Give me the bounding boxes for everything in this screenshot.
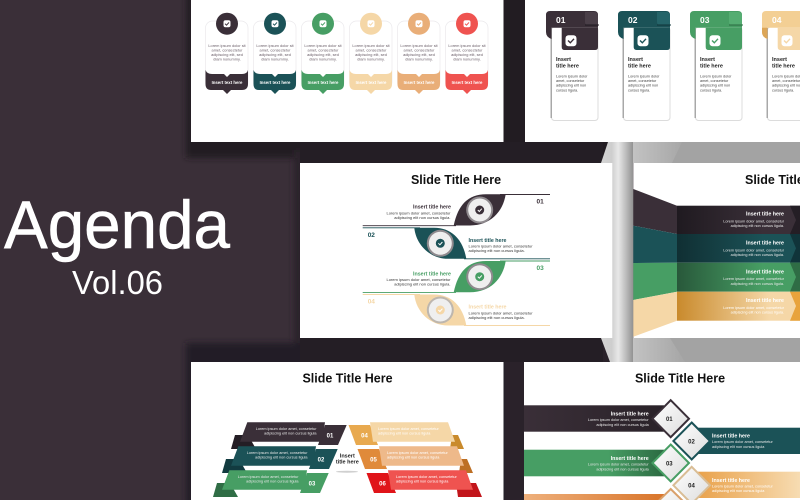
card 1: adipiscing elit, sed xyxy=(211,52,243,57)
card 04: 04 xyxy=(772,15,782,25)
card 04: Insert xyxy=(772,57,787,63)
card 1: Lorem ipsum dolor sit xyxy=(208,43,247,48)
band 2 xyxy=(677,234,800,263)
step 03: Lorem ipsum dolor amet, consetetur xyxy=(386,277,451,282)
card 3: adipiscing elit, sed xyxy=(307,52,339,57)
band 01 xyxy=(524,405,664,432)
band 05 xyxy=(524,494,664,500)
ribbon 01: Lorem ipsum dolor amet, consetetur xyxy=(256,427,317,431)
title: Agenda Vol.06: Agenda xyxy=(4,187,230,263)
band 1: Insert title here xyxy=(746,212,784,218)
card 01 xyxy=(546,11,599,120)
ribbon 06: adipiscing elit non cursus ligula xyxy=(396,480,449,484)
band 4: Insert title here xyxy=(746,298,784,304)
card 3: diam nonummy. xyxy=(309,56,337,62)
title: Agenda Vol.06: Vol.06 xyxy=(72,264,163,301)
card 03: adipiscing elit non xyxy=(700,84,730,88)
band 4: adipiscing elit non cursus ligula. xyxy=(731,310,784,314)
step 01: Lorem ipsum dolor amet, consetetur xyxy=(386,210,451,215)
card 03: amet, consetetur xyxy=(700,79,729,83)
diamond 04 xyxy=(673,467,710,500)
card 02: Lorem ipsum dolor xyxy=(628,74,660,78)
step 02: Lorem ipsum dolor amet, consetetur xyxy=(468,244,533,249)
ribbon 01: adipiscing elit non cursus ligula xyxy=(264,432,317,436)
step 04 xyxy=(363,294,550,326)
diamond 03 xyxy=(652,444,689,482)
band 04: Lorem ipsum dolor amet, consetetur xyxy=(712,484,774,488)
card 4: amet, consectetur xyxy=(356,48,387,52)
step 03 xyxy=(363,261,550,292)
card 04 xyxy=(762,11,800,120)
slide 5 heading: Slide Title Here xyxy=(302,372,393,386)
band 4 xyxy=(677,292,800,321)
band 3: Insert title here xyxy=(746,269,784,275)
panel: slide 2, numbered flag cards xyxy=(525,0,800,142)
card 01: cursus ligula. xyxy=(556,88,578,92)
band 2: Insert title here xyxy=(746,240,784,246)
diamond 02: 02 xyxy=(688,439,695,445)
ribbon 03 xyxy=(213,470,329,497)
card 01: title here xyxy=(556,64,579,70)
card 02: amet, consetetur xyxy=(628,79,657,83)
card 04: amet, consetetur xyxy=(772,79,800,83)
band 01: Lorem ipsum dolor amet, consetetur xyxy=(588,418,649,422)
panel: slide 3, leaf timeline xyxy=(300,163,612,338)
ribbon 03: 03 xyxy=(309,481,316,487)
panel: slide 6, diamond steps xyxy=(524,362,800,500)
card 03 xyxy=(690,11,743,120)
card 02: adipiscing elit non xyxy=(628,84,658,88)
band 4: Lorem ipsum dolor amet, consetetur xyxy=(723,306,785,310)
card 02: cursus ligula. xyxy=(628,88,650,92)
card 1 xyxy=(206,13,248,94)
band 02 xyxy=(698,428,800,454)
card 1: Insert text here xyxy=(212,80,243,85)
band 3: adipiscing elit non cursus ligula. xyxy=(731,282,784,286)
diamond 01 xyxy=(652,400,689,437)
card 01: Insert xyxy=(556,57,571,63)
card 01: Lorem ipsum dolor xyxy=(556,74,588,78)
diamond 05 xyxy=(652,489,689,500)
card 6: Lorem ipsum dolor sit xyxy=(448,43,487,48)
ribbon 04: 04 xyxy=(361,433,368,439)
center label: title here xyxy=(336,460,359,466)
step 03: Insert title here xyxy=(413,271,451,277)
band 3 xyxy=(677,263,800,292)
card 3: Lorem ipsum dolor sit xyxy=(304,43,343,48)
card 02: Insert xyxy=(628,57,643,63)
card 1: diam nonummy. xyxy=(213,56,241,62)
ribbon 01: 01 xyxy=(327,433,334,439)
card 6: amet, consectetur xyxy=(452,48,483,52)
card 5: Insert text here xyxy=(404,80,435,85)
band 02: adipiscing elit non cursus ligula xyxy=(712,445,765,449)
card 5: diam nonummy. xyxy=(405,56,433,62)
band 03: Lorem ipsum dolor amet, consetetur xyxy=(588,462,649,466)
band 04: adipiscing elit non cursus ligula xyxy=(712,489,765,493)
band 2: Lorem ipsum dolor amet, consetetur xyxy=(723,248,785,252)
card 6: Insert text here xyxy=(452,80,483,85)
card 6: diam nonummy. xyxy=(453,56,481,62)
card 01: adipiscing elit non xyxy=(556,84,586,88)
card 3: amet, consectetur xyxy=(308,48,339,52)
card 2: diam nonummy. xyxy=(261,56,289,62)
band 03: adipiscing elit non cursus ligula xyxy=(596,467,650,471)
card 5: Lorem ipsum dolor sit xyxy=(400,43,439,48)
step 02: Insert title here xyxy=(468,238,507,244)
ribbon 06: 06 xyxy=(379,481,386,487)
card 03: Lorem ipsum dolor xyxy=(700,74,732,78)
center label: Insert xyxy=(340,453,355,459)
card 04: cursus ligula. xyxy=(772,88,794,92)
ribbon 02: adipiscing elit non cursus ligula xyxy=(255,456,308,460)
card 5: adipiscing elit, sed xyxy=(403,52,435,57)
ribbon 03: adipiscing elit non cursus ligula xyxy=(246,480,299,484)
diamond 01: 01 xyxy=(666,417,673,423)
step 02: 02 xyxy=(368,232,375,239)
ribbon 03: Lorem ipsum dolor amet, consetetur xyxy=(238,475,299,479)
step 01: Insert title here xyxy=(413,205,451,211)
ribbon 05: 05 xyxy=(370,457,377,463)
ribbon 05: Lorem ipsum dolor amet, consetetur xyxy=(387,451,449,455)
card 03: cursus ligula. xyxy=(700,88,722,92)
ribbon 05 xyxy=(358,446,473,473)
panel: slide 1, six check cards xyxy=(191,0,504,142)
band 01: Insert title here xyxy=(611,411,649,417)
band 01: adipiscing elit non cursus ligula xyxy=(596,423,650,427)
step 01: 01 xyxy=(536,198,544,206)
step 03: adipiscing elit non cursus ligula. xyxy=(394,282,450,287)
step 04: 04 xyxy=(368,298,375,306)
card 5 xyxy=(398,13,440,94)
band 1 xyxy=(677,206,800,234)
band 03: Insert title here xyxy=(611,456,649,462)
panel: slide 4, perspective bands xyxy=(633,163,800,338)
step 02 xyxy=(363,228,550,259)
ribbon 02: 02 xyxy=(318,457,325,463)
band 02: Lorem ipsum dolor amet, consetetur xyxy=(712,440,774,444)
card 4 xyxy=(350,13,392,94)
card 02 xyxy=(618,11,671,120)
ribbon 04: adipiscing elit non cursus ligula xyxy=(378,432,431,436)
card 1: amet, consectetur xyxy=(212,48,243,52)
panel: slide 5, ribbon banners xyxy=(191,362,504,500)
card 2: adipiscing elit, sed xyxy=(259,52,291,57)
band 04: Insert title here xyxy=(712,478,750,484)
title: Agenda Vol.06 xyxy=(4,187,230,301)
card 4: adipiscing elit, sed xyxy=(355,52,387,57)
band 04 xyxy=(698,472,800,498)
left wall xyxy=(633,189,677,337)
diamond 02 xyxy=(673,422,710,460)
card 03: title here xyxy=(700,64,723,70)
card 3 xyxy=(302,13,344,94)
band 1: adipiscing elit non cursus ligula. xyxy=(731,224,784,228)
card 02: title here xyxy=(628,64,651,70)
slide 3 heading: Slide Title Here xyxy=(411,173,501,187)
card 4: Lorem ipsum dolor sit xyxy=(352,43,391,48)
diamond 03: 03 xyxy=(666,461,673,467)
ribbon 02: Lorem ipsum dolor amet, consetetur xyxy=(247,451,308,455)
card 6: adipiscing elit, sed xyxy=(451,52,483,57)
band 1: Lorem ipsum dolor amet, consetetur xyxy=(723,220,785,224)
ribbon 05: adipiscing elit non cursus ligula xyxy=(387,456,440,460)
band 2: adipiscing elit non cursus ligula. xyxy=(731,253,784,257)
step 03: 03 xyxy=(536,265,544,272)
band 02: Insert title here xyxy=(712,434,750,440)
ribbon 06 xyxy=(366,470,482,497)
band 3: Lorem ipsum dolor amet, consetetur xyxy=(723,277,785,281)
card 03: Insert xyxy=(700,57,715,63)
card 2: Insert text here xyxy=(260,80,291,85)
step 04: Insert title here xyxy=(468,305,507,311)
card 4: Insert text here xyxy=(356,80,387,85)
ribbon 04: Lorem ipsum dolor amet, consetetur xyxy=(378,427,440,431)
center label xyxy=(336,453,359,473)
card 02: 02 xyxy=(628,15,638,25)
card 2: amet, consectetur xyxy=(260,48,291,52)
slide 6 heading: Slide Title Here xyxy=(635,372,725,386)
card 5: amet, consectetur xyxy=(404,48,435,52)
step 01 xyxy=(363,194,550,226)
ribbon 02 xyxy=(222,446,338,473)
diamond 04: 04 xyxy=(688,484,695,490)
ribbon 06: Lorem ipsum dolor amet, consetetur xyxy=(396,475,458,479)
band 03 xyxy=(524,450,664,476)
card 3: Insert text here xyxy=(308,80,339,85)
card 6 xyxy=(446,13,488,94)
card 03: 03 xyxy=(700,15,710,25)
card 4: diam nonummy. xyxy=(357,56,385,62)
step 04: Lorem ipsum dolor amet, consetetur xyxy=(468,310,533,315)
step 02: adipiscing elit non cursus ligula. xyxy=(468,248,525,253)
ribbon 04 xyxy=(348,422,464,449)
step 04: adipiscing elit non cursus ligula. xyxy=(468,315,525,320)
card 04: title here xyxy=(772,64,795,70)
card 2 xyxy=(254,13,296,94)
card 01: amet, consetetur xyxy=(556,79,585,83)
ribbon 01 xyxy=(231,422,347,449)
card 2: Lorem ipsum dolor sit xyxy=(256,43,295,48)
card 01: 01 xyxy=(556,15,566,25)
step 01: adipiscing elit non cursus ligula. xyxy=(394,215,450,220)
